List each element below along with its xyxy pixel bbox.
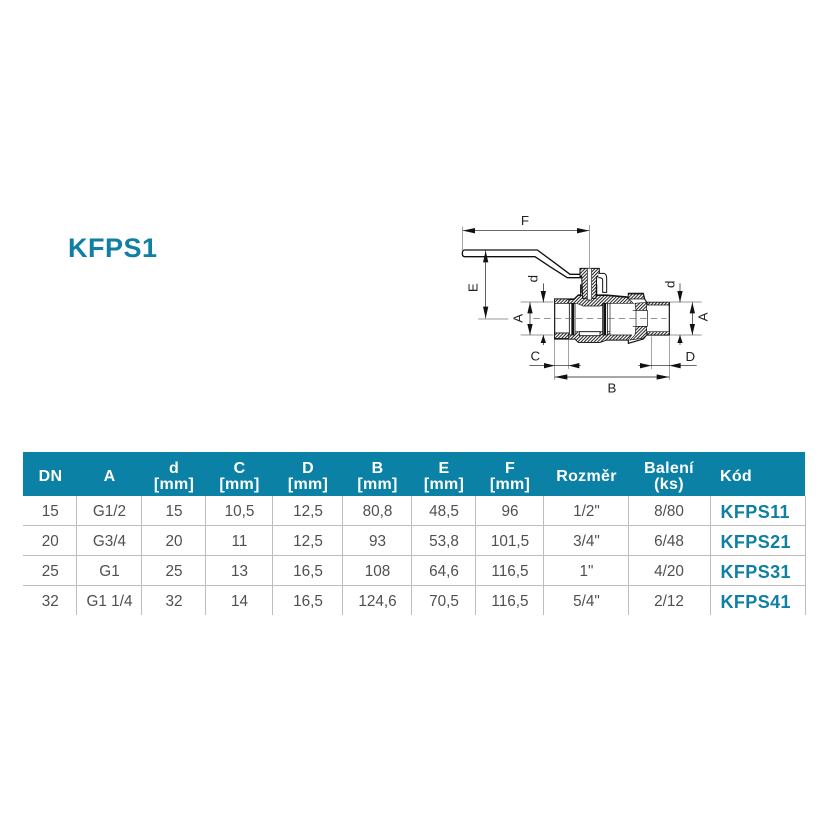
table header: [mm]: [288, 476, 328, 493]
row: KFPS41: 16,5: [293, 593, 323, 610]
table header: C: [234, 460, 245, 476]
row: KFPS21: 11: [232, 533, 247, 550]
row: KFPS11: 8/80: [654, 503, 684, 520]
row: KFPS41: 5/4": [573, 593, 600, 610]
dimension d left: d: [525, 275, 540, 282]
extension lines: [463, 225, 702, 380]
dimension A left: [511, 302, 533, 335]
row: KFPS21: 20: [165, 533, 182, 550]
row: KFPS11: 96: [501, 503, 518, 520]
table header: Kód: [720, 468, 752, 485]
row: KFPS41: [42, 592, 791, 612]
table header: [23, 452, 805, 612]
dimension A right: A: [696, 312, 711, 321]
row: KFPS21: 6/48: [654, 533, 684, 550]
dimension C: C: [531, 348, 541, 363]
table header: Balení: [644, 460, 694, 476]
row: KFPS41: G1 1/4: [87, 593, 132, 610]
table header: E: [438, 460, 449, 476]
table header: A: [104, 468, 115, 485]
table header: [mm]: [490, 476, 530, 493]
center line: [533, 317, 667, 319]
row: KFPS41: 32: [42, 593, 59, 610]
table header: DN: [39, 468, 62, 485]
row: KFPS21: 93: [369, 533, 386, 550]
row: KFPS31: 116,5: [491, 563, 529, 580]
row: KFPS41: 124,6: [358, 593, 397, 610]
row: KFPS31: 25: [165, 563, 182, 580]
row: KFPS21: 53,8: [429, 533, 459, 550]
dimension F: F: [521, 213, 529, 228]
row: KFPS41: 14: [231, 593, 248, 610]
dimension E: E: [465, 283, 480, 292]
stem and nut: [580, 268, 599, 298]
row: KFPS11: 48,5: [429, 503, 459, 520]
row: KFPS21: [42, 532, 791, 552]
row: KFPS31: 1": [580, 563, 593, 580]
dimension d right: [663, 281, 683, 345]
dimension D: [638, 349, 697, 368]
dimension A right: [690, 302, 711, 335]
row: KFPS31: 25: [42, 563, 59, 580]
row: KFPS21: 3/4": [573, 533, 600, 550]
row: KFPS31: 64,6: [429, 563, 459, 580]
dimension F: [463, 213, 589, 233]
row: KFPS41: 2/12: [654, 593, 684, 610]
row: KFPS31: G1: [99, 563, 120, 580]
row: KFPS11: 10,5: [225, 503, 254, 520]
dimension d right: d: [663, 281, 678, 288]
row: KFPS21: KFPS21: [720, 532, 791, 552]
dimension B: B: [608, 380, 617, 395]
row: KFPS21: 12,5: [293, 533, 323, 550]
specification table: [23, 452, 806, 615]
dimension D: D: [686, 349, 695, 364]
table header: [mm]: [219, 476, 260, 493]
row: KFPS41: 32: [165, 593, 182, 610]
table header: [mm]: [424, 476, 464, 493]
row: KFPS31: [42, 562, 791, 582]
valve body: [555, 268, 669, 343]
row: KFPS31: KFPS31: [720, 562, 791, 582]
table header: Rozměr: [556, 468, 617, 485]
row: KFPS11: 80,8: [363, 503, 392, 520]
row: KFPS41: KFPS41: [720, 592, 791, 612]
lever handle: [462, 250, 581, 278]
row: KFPS11: G1/2: [93, 503, 126, 520]
row: KFPS21: 101,5: [491, 533, 529, 550]
row: KFPS11: 1/2": [573, 503, 600, 520]
table header: (ks): [654, 476, 684, 493]
row: KFPS11: 15: [165, 503, 182, 520]
row: KFPS31: 16,5: [293, 563, 323, 580]
table header: D: [302, 460, 314, 476]
row: KFPS41: 116,5: [491, 593, 529, 610]
row: KFPS21: 20: [42, 533, 59, 550]
row: KFPS21: G3/4: [93, 533, 126, 550]
dimension d left: [525, 275, 546, 345]
row: KFPS31: 108: [365, 563, 390, 580]
title: KFPS1: [68, 233, 158, 263]
row: KFPS41: 70,5: [429, 593, 459, 610]
row: KFPS11: 15: [42, 503, 59, 520]
dimension C: [529, 348, 581, 368]
row: KFPS11: KFPS11: [720, 502, 790, 522]
dimension A left: A: [511, 314, 526, 323]
row: KFPS11: [42, 502, 790, 522]
table header: B: [372, 460, 383, 476]
row: KFPS11: 12,5: [293, 503, 323, 520]
row: KFPS31: 4/20: [654, 563, 684, 580]
table header: F: [505, 460, 515, 476]
dimension E: [465, 251, 488, 318]
row: KFPS31: 13: [231, 563, 248, 580]
dimension B: [555, 374, 669, 395]
table header: [mm]: [154, 476, 194, 493]
table header: d: [169, 460, 179, 476]
table header: [mm]: [357, 476, 398, 493]
